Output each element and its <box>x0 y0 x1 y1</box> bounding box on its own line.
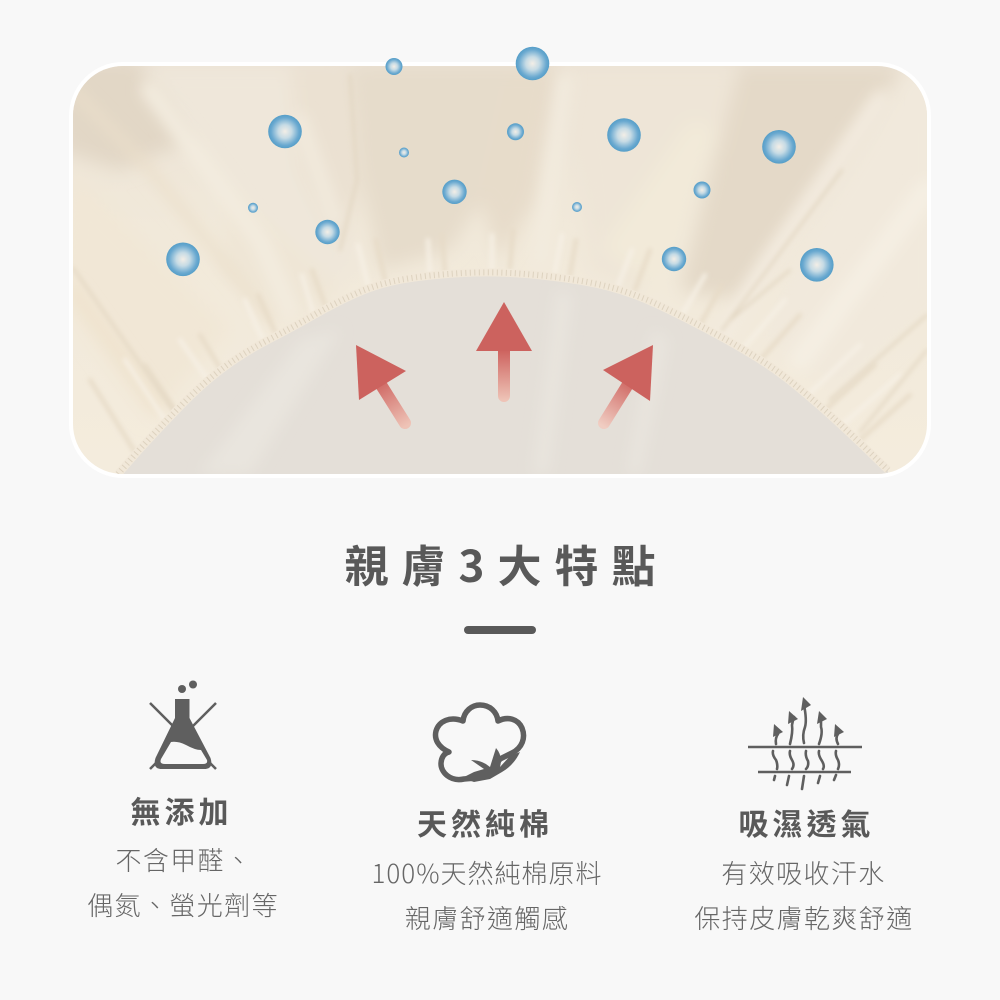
heading: 吸濕透氣 <box>738 800 874 844</box>
description: 有效吸收汗水 <box>721 854 886 891</box>
description: 不含甲醛、 <box>115 841 252 878</box>
column: pure cotton <box>371 702 603 936</box>
column: no additives <box>87 680 279 923</box>
description: 100%天然純棉原料 <box>371 854 603 891</box>
moisture bubbles <box>166 47 834 282</box>
heading: 無添加 <box>130 788 232 832</box>
elastic hem <box>118 272 888 474</box>
title: 親膚3大特點 <box>345 531 668 595</box>
icon: rising moisture through fabric <box>748 697 862 790</box>
title underline <box>464 626 536 634</box>
hero photo panel: fitted sheet with moisture bubbles <box>73 46 927 474</box>
column: moisture wicking <box>694 697 914 936</box>
arrow: up right <box>603 345 653 423</box>
icon: cotton boll <box>432 702 526 782</box>
arrow: up <box>476 302 532 396</box>
column: pure cotton: 親膚舒適觸感 <box>405 899 569 936</box>
fabric pleats gathered at hem <box>90 230 910 452</box>
arrow: up left <box>356 345 406 423</box>
heading: 天然純棉 <box>417 800 553 844</box>
fabric <box>73 66 927 474</box>
column: no additives: 偶氮、螢光劑等 <box>87 886 279 923</box>
icon: crossed-out flask <box>149 680 217 770</box>
bed surface <box>118 272 888 480</box>
column: moisture wicking: 保持皮膚乾爽舒適 <box>694 899 914 936</box>
